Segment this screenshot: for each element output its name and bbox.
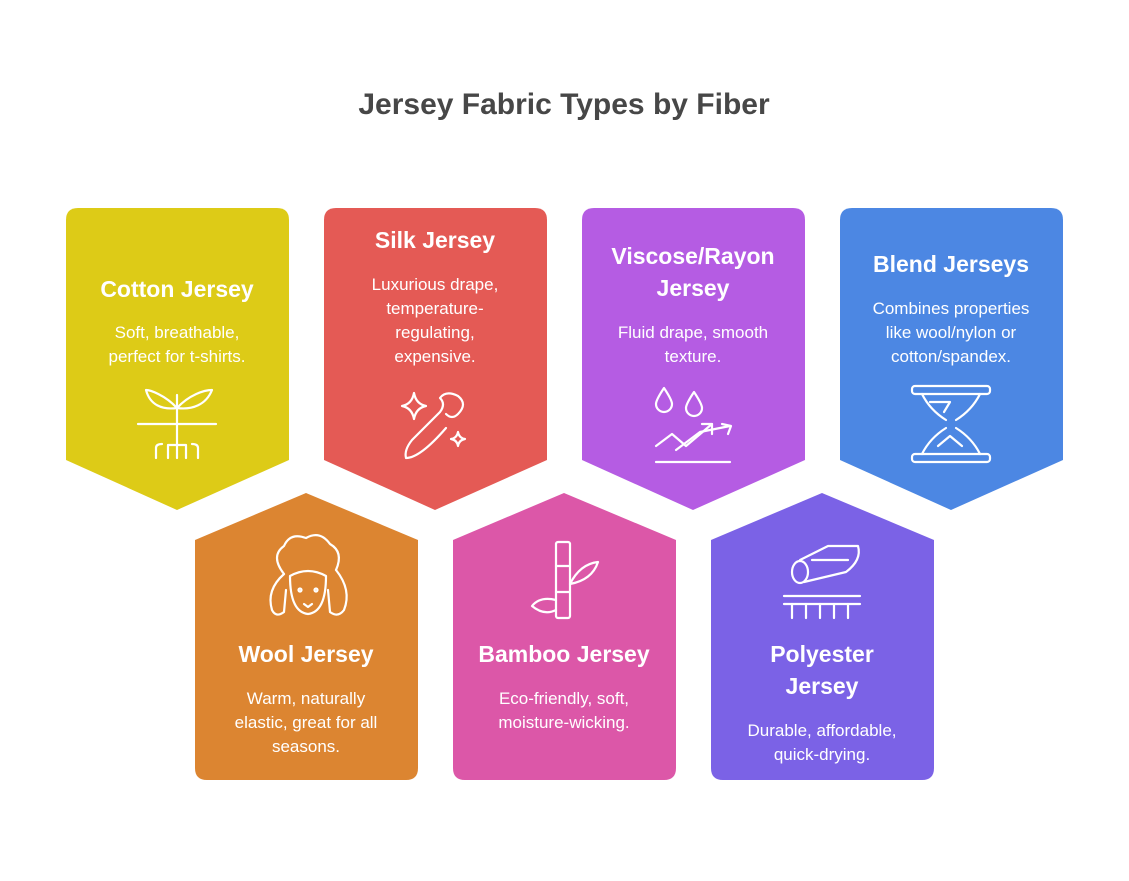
panel: viscose/rayon jersey: Jersey bbox=[657, 275, 730, 301]
panel: bamboo jersey: Bamboo Jersey bbox=[478, 641, 650, 667]
icon: sheep bbox=[270, 535, 347, 615]
panel: polyester jersey: Jersey bbox=[786, 673, 859, 699]
panel: wool jersey: seasons. bbox=[272, 737, 340, 756]
panel: silk jersey: temperature- bbox=[386, 299, 484, 318]
panel: viscose/rayon jersey: Fluid drape, smooth bbox=[618, 323, 768, 342]
panel: blend jerseys: Combines properties bbox=[873, 299, 1029, 318]
icon: drops and arrows bbox=[656, 388, 731, 462]
panel: polyester jersey bbox=[711, 493, 934, 780]
panel: cotton jersey: perfect for t-shirts. bbox=[109, 347, 245, 366]
icon: fabric roll bbox=[784, 546, 860, 618]
panel: cotton jersey bbox=[66, 208, 289, 510]
panel: cotton jersey: Soft, breathable, bbox=[115, 323, 239, 342]
panel: viscose/rayon jersey: texture. bbox=[665, 347, 721, 366]
panel: wool jersey: Wool Jersey bbox=[238, 641, 374, 667]
panel: polyester jersey: Polyester bbox=[770, 641, 874, 667]
panel: bamboo jersey: moisture-wicking. bbox=[498, 713, 630, 732]
panel: blend jerseys: Blend Jerseys bbox=[873, 251, 1029, 277]
panel: silk jersey: regulating, bbox=[395, 323, 475, 342]
panel: silk jersey: Luxurious drape, bbox=[372, 275, 498, 294]
panel: wool jersey bbox=[195, 493, 418, 780]
panel: wool jersey: Warm, naturally bbox=[247, 689, 366, 708]
icon: blend hourglass bbox=[912, 386, 990, 462]
panel: viscose/rayon jersey: Viscose/Rayon bbox=[611, 243, 775, 269]
panel: blend jerseys: cotton/spandex. bbox=[891, 347, 1011, 366]
panel: silk jersey: expensive. bbox=[394, 347, 476, 366]
panel: cotton jersey: Cotton Jersey bbox=[100, 276, 254, 302]
panel: silk jersey bbox=[324, 208, 547, 510]
panel: wool jersey: elastic, great for all bbox=[235, 713, 377, 732]
panel: polyester jersey: Durable, affordable, bbox=[747, 721, 897, 740]
icon: sprout bbox=[138, 390, 216, 458]
panel: blend jerseys bbox=[840, 208, 1063, 510]
icon: bamboo bbox=[532, 542, 598, 618]
panel: bamboo jersey: Eco-friendly, soft, bbox=[499, 689, 629, 708]
panel: silk jersey: Silk Jersey bbox=[375, 227, 495, 253]
panel: polyester jersey: quick-drying. bbox=[774, 745, 870, 764]
panel: blend jerseys: like wool/nylon or bbox=[886, 323, 1017, 342]
panel: viscose/rayon jersey bbox=[582, 208, 805, 510]
panel: bamboo jersey bbox=[453, 493, 676, 780]
title: Jersey Fabric Types by Fiber bbox=[358, 88, 770, 121]
icon: silk sparkle bbox=[402, 393, 465, 458]
